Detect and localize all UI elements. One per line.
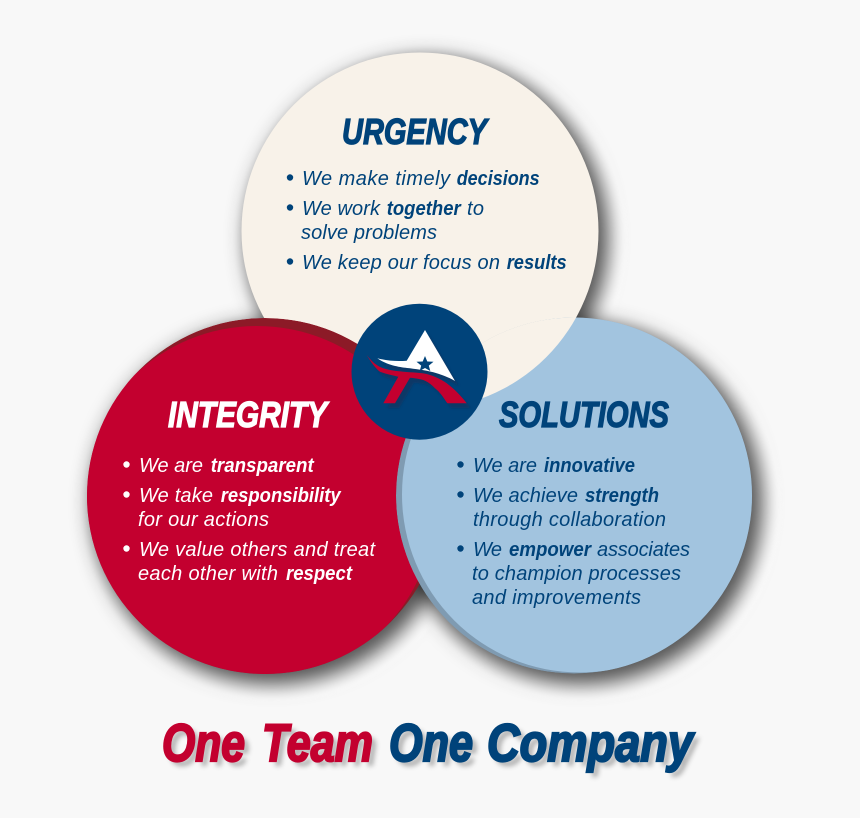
- urgency list: results: [507, 252, 567, 274]
- tagline shadow: Company: [492, 719, 700, 778]
- urgency list: decisions: [457, 168, 540, 190]
- tagline: one company: One: [389, 714, 473, 773]
- urgency heading: URGENCY: [342, 111, 489, 152]
- logo shadow: [371, 335, 471, 408]
- logo letter A: [377, 330, 455, 381]
- urgency list: [287, 168, 567, 274]
- urgency list: solve problems: [301, 222, 437, 244]
- solutions list: through collaboration: [473, 509, 666, 531]
- panel: integrity: [87, 318, 420, 674]
- urgency list: We keep our focus on: [302, 252, 500, 274]
- tagline: one team: One: [162, 714, 245, 773]
- urgency list: together: [387, 198, 462, 220]
- solutions list: to champion processes: [472, 563, 681, 585]
- integrity list: respect: [286, 563, 353, 585]
- solutions list: empower: [509, 539, 592, 561]
- solutions list: associates: [597, 539, 690, 561]
- integrity list: each other with: [138, 563, 278, 585]
- integrity list: We are: [139, 455, 203, 477]
- solutions list: strength: [585, 485, 659, 507]
- urgency circle: [242, 52, 598, 410]
- panel: urgency: [242, 52, 598, 410]
- integrity list: We take: [139, 485, 213, 507]
- integrity list: transparent: [211, 455, 315, 477]
- solutions list: [457, 455, 690, 609]
- solutions list: innovative: [544, 455, 635, 477]
- integrity heading: INTEGRITY: [168, 394, 329, 435]
- solutions circle: [396, 318, 752, 674]
- urgency list: We work: [302, 198, 381, 220]
- urgency list: to: [467, 198, 484, 220]
- tagline shadow: Team: [267, 719, 378, 778]
- integrity list: responsibility: [221, 485, 342, 507]
- solutions list: We are: [473, 455, 537, 477]
- solutions list: We achieve: [473, 485, 578, 507]
- solutions heading: SOLUTIONS: [499, 394, 669, 435]
- solutions list: We: [473, 539, 502, 561]
- tagline shadow: [167, 719, 700, 778]
- logo swoosh: [367, 355, 467, 403]
- integrity list: for our actions: [138, 509, 269, 531]
- tagline: one team: [162, 714, 373, 773]
- tagline: [162, 714, 700, 778]
- icon: company logo: [352, 304, 488, 440]
- integrity list: [123, 455, 376, 585]
- tagline: one company: [389, 714, 695, 773]
- tagline shadow: One: [394, 719, 478, 778]
- tagline shadow: One: [167, 719, 250, 778]
- panel: solutions: [396, 318, 752, 674]
- urgency list: We make timely: [302, 168, 451, 190]
- integrity list: We value others and treat: [139, 539, 376, 561]
- drop shadows: [90, 56, 763, 685]
- halo behind circles: [78, 42, 781, 702]
- tagline: one company: Company: [487, 714, 695, 773]
- tagline: one team: Team: [262, 714, 373, 773]
- solutions list: and improvements: [472, 587, 641, 609]
- logo star: [416, 356, 434, 371]
- integrity circle: [87, 318, 420, 674]
